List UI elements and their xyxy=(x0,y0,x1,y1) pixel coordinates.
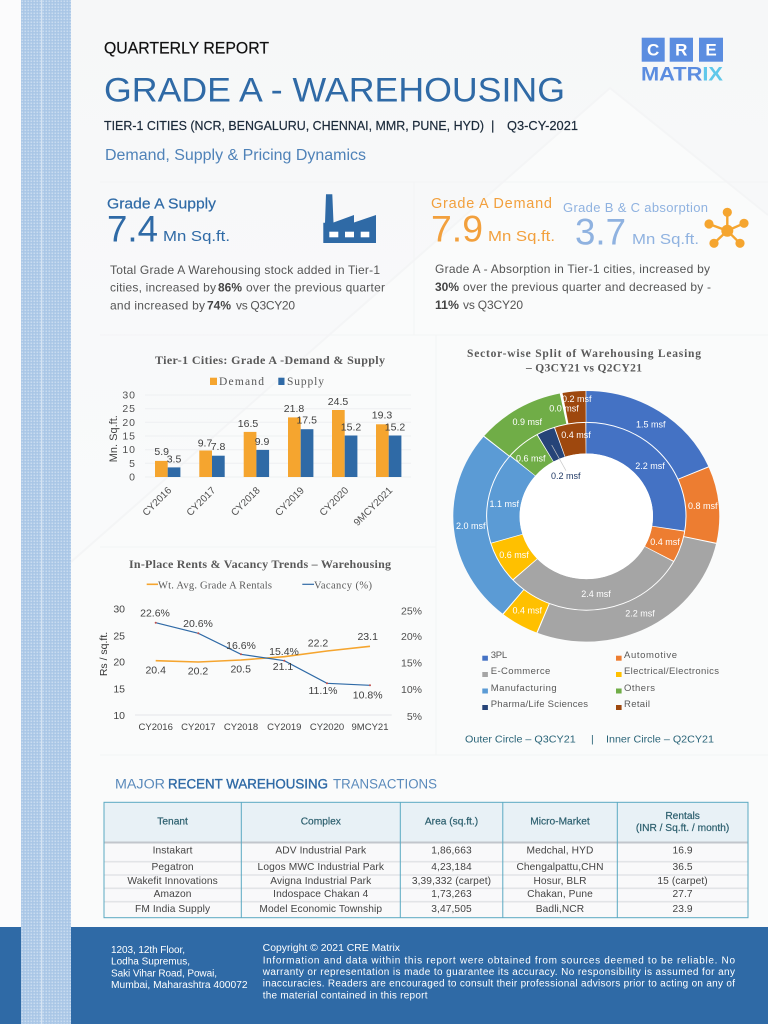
row: Amazon: Indospace Chakan 4 xyxy=(273,889,369,900)
supply heading: Grade A Supply xyxy=(107,196,217,212)
left axis values: 10 xyxy=(113,710,125,722)
donut value labels: 0.4 msf xyxy=(650,537,680,547)
donut value labels: 0.6 msf xyxy=(516,454,546,464)
right axis values: 5% xyxy=(407,711,422,723)
donut value labels: 0.4 msf xyxy=(561,430,591,440)
footer address xyxy=(111,945,248,991)
absorption value: 3.7 xyxy=(575,212,626,252)
table header xyxy=(157,811,729,834)
data labels xyxy=(154,396,405,466)
legend: Vacancy (%) xyxy=(314,580,372,592)
donut legend: Retail xyxy=(624,699,650,710)
row: Instakart: Medchal, HYD xyxy=(527,846,593,856)
chart: sector split donut xyxy=(422,348,750,746)
right axis values: 10% xyxy=(401,684,422,696)
row: Amazon: 1,73,263 xyxy=(431,889,472,900)
donut legend: Electrical/Electronics xyxy=(624,666,719,677)
left axis values: 30 xyxy=(113,603,125,615)
vacancy labels: 16.6% xyxy=(226,640,256,652)
x axis labels xyxy=(139,722,388,733)
main title: GRADE A - WAREHOUSING xyxy=(104,72,565,110)
footer address: 1203, 12th Floor, xyxy=(111,945,185,956)
row: Wakefit Innovations: 3,39,332 (carpet) xyxy=(412,876,491,887)
logo: CRE Matrix: R xyxy=(675,40,687,60)
demand description: 30% xyxy=(435,280,459,294)
vacancy labels xyxy=(140,608,383,701)
section tagline: Demand, Supply & Pricing Dynamics xyxy=(105,147,366,164)
supply description: over the previous quarter xyxy=(246,281,385,295)
rental labels xyxy=(145,631,378,678)
data labels: 15.2 xyxy=(385,422,405,434)
right axis values: 20% xyxy=(401,631,422,643)
donut value labels: 1.5 msf xyxy=(636,420,666,430)
donut rings xyxy=(422,362,750,671)
icon: factory xyxy=(323,194,376,243)
row: Instakart: ADV Industrial Park xyxy=(275,846,367,856)
vacancy line xyxy=(156,623,370,685)
y axis values: 10 xyxy=(122,444,136,456)
chart: rents and vacancy lines xyxy=(98,557,422,733)
row: FM India Supply: FM India Supply xyxy=(135,904,211,915)
subtitle: cities and quarter: Q3-CY-2021 xyxy=(507,118,578,133)
row: Wakefit Innovations: 15 (carpet) xyxy=(657,876,708,887)
y axis values: 30 xyxy=(122,390,136,402)
data labels: 21.8 xyxy=(284,403,304,415)
footer band xyxy=(0,927,768,1024)
table header: Micro-Market xyxy=(530,816,590,828)
section heading: transactions: TRANSACTIONS xyxy=(333,776,437,792)
donut value labels: 0.2 msf xyxy=(562,394,592,404)
x axis labels: CY2020 xyxy=(310,722,344,733)
chart: demand and supply bars xyxy=(108,353,411,528)
row: Pegatron: Chengalpattu,CHN xyxy=(516,862,604,873)
row: Wakefit Innovations: Avigna Industrial Park xyxy=(270,876,372,887)
vacancy labels: 10.8% xyxy=(353,689,383,701)
logo: CRE Matrix xyxy=(641,38,723,86)
demand description: Grade A - Absorption in Tier-1 cities, increased by xyxy=(435,262,710,276)
rental labels: 23.1 xyxy=(357,631,378,643)
supply description xyxy=(110,263,385,312)
y axis title: Mn. Sq.ft. xyxy=(108,415,120,462)
footer disclaimer: Copyright © 2021 CRE Matrix xyxy=(263,943,400,954)
rental labels: 20.4 xyxy=(145,665,166,677)
vacancy markers xyxy=(155,622,371,686)
legend xyxy=(210,376,324,388)
y axis values: 25 xyxy=(122,403,136,415)
x axis labels: CY2018 xyxy=(224,722,258,733)
row: Instakart: 1,86,663 xyxy=(431,846,472,856)
footer address: Saki Vihar Road, Powai, xyxy=(111,968,217,980)
vacancy labels: 20.6% xyxy=(183,618,213,630)
demand heading: Grade A Demand xyxy=(431,196,552,212)
footer address: Lodha Supremus, xyxy=(111,956,190,968)
supply description: 86% xyxy=(218,281,242,295)
row: Instakart xyxy=(153,846,693,856)
legend xyxy=(147,580,372,592)
data labels: 24.5 xyxy=(328,396,348,408)
donut legend: 3PL xyxy=(491,650,507,661)
demand description: 11% xyxy=(435,298,459,312)
row: Wakefit Innovations: Wakefit Innovations xyxy=(127,876,218,887)
row: Amazon xyxy=(154,889,693,900)
legend: Wt. Avg. Grade A Rentals xyxy=(158,580,272,592)
donut value labels: 0.9 msf xyxy=(513,417,543,427)
absorption heading: Grade B & C absorption xyxy=(563,200,708,215)
ring key: | xyxy=(591,734,594,746)
chart title: – Q3CY21 vs Q2CY21 xyxy=(525,363,642,375)
donut value labels: 1.1 msf xyxy=(490,499,520,509)
rental labels: 20.2 xyxy=(188,666,208,678)
section heading: transactions: RECENT WAREHOUSING xyxy=(168,776,328,792)
x axis labels xyxy=(141,485,395,528)
x axis labels: CY2019 xyxy=(273,485,307,519)
absorption unit: Mn Sq.ft. xyxy=(632,231,699,248)
rental labels: 22.2 xyxy=(308,637,328,649)
data labels: 17.5 xyxy=(296,415,317,427)
chart title xyxy=(467,348,701,375)
donut legend: E-Commerce xyxy=(491,666,550,677)
rental labels: 21.1 xyxy=(273,661,293,673)
footer disclaimer: Information and data within this report were obtained from sources deemed to be reliable. No xyxy=(263,955,735,966)
subtitle: cities and quarter: TIER-1 CITIES (NCR, BENGALURU, CHENNAI, MMR, PUNE, HYD) xyxy=(104,118,484,133)
vacancy labels: 15.4% xyxy=(269,646,299,658)
demand description: over the previous quarter and decreased by - xyxy=(463,280,711,294)
left axis values: 15 xyxy=(113,683,125,695)
demand value: 7.9 xyxy=(431,209,483,250)
row: Pegatron: Logos MWC Industrial Park xyxy=(258,862,385,873)
donut value labels: 0.2 msf xyxy=(551,471,581,481)
left axis title: Rs / sq.ft. xyxy=(98,632,110,676)
data labels: 5.9 xyxy=(154,446,169,458)
table header: Complex xyxy=(301,816,341,828)
row: FM India Supply: Badli,NCR xyxy=(536,904,584,915)
row: Wakefit Innovations xyxy=(127,876,708,887)
chart title: Sector-wise Split of Warehousing Leasing xyxy=(467,348,701,360)
vacancy labels: 11.1% xyxy=(308,685,338,697)
section heading: transactions: MAJOR xyxy=(115,776,165,792)
donut legend: Pharma/Life Sciences xyxy=(491,699,588,710)
logo: CRE Matrix: E xyxy=(705,40,717,60)
rentals line xyxy=(156,646,370,662)
x axis labels: CY2020 xyxy=(318,485,351,519)
icon: network nodes xyxy=(704,208,749,248)
data labels: 3.5 xyxy=(167,454,181,466)
x axis labels: CY2016 xyxy=(139,722,173,733)
outer ring: Q3CY21 xyxy=(422,362,750,671)
donut value labels: 0.4 msf xyxy=(513,606,543,616)
left axis values: 20 xyxy=(113,657,125,669)
y axis values: 15 xyxy=(122,430,136,442)
vacancy labels: 22.6% xyxy=(140,608,170,620)
y axis values: 0 xyxy=(129,472,136,484)
y axis values: 5 xyxy=(129,458,136,470)
x axis labels: CY2017 xyxy=(185,485,218,519)
table: recent transactions xyxy=(104,802,748,918)
chart title: In-Place Rents & Vacancy Trends – Warehousing xyxy=(129,557,391,571)
row: FM India Supply: 23.9 xyxy=(672,904,693,915)
donut value labels: 2.4 msf xyxy=(581,589,611,599)
decorative side stripe xyxy=(21,0,71,1024)
row: FM India Supply xyxy=(135,904,693,915)
donut legend: Manufacturing xyxy=(491,683,557,694)
x axis labels: CY2017 xyxy=(181,722,215,733)
donut legend xyxy=(482,650,719,710)
x axis labels: 9MCY21 xyxy=(352,722,388,733)
panel: grade A demand xyxy=(431,196,749,312)
supply value: 7.4 xyxy=(107,209,158,250)
data labels: 9.9 xyxy=(255,436,269,448)
donut legend: Automotive xyxy=(624,650,677,661)
row: Pegatron xyxy=(152,862,693,873)
x axis labels: CY2016 xyxy=(141,485,174,519)
row: Wakefit Innovations: Hosur, BLR xyxy=(533,876,587,887)
row: Amazon: Amazon xyxy=(154,889,192,900)
donut legend: Others xyxy=(624,683,655,694)
data labels: 7.8 xyxy=(211,441,225,453)
row: Pegatron: Pegatron xyxy=(152,862,194,873)
legend: Supply xyxy=(287,376,324,388)
data labels: 19.3 xyxy=(372,409,392,421)
demand bars xyxy=(155,410,389,477)
logo: CRE Matrix: MATR IX xyxy=(641,64,723,86)
y axis values: 20 xyxy=(122,417,136,429)
row: Amazon: Chakan, Pune xyxy=(527,889,593,900)
y axis values xyxy=(122,390,136,484)
x axis labels: CY2019 xyxy=(267,722,301,733)
row: Instakart: Instakart xyxy=(153,846,193,856)
demand description xyxy=(435,262,711,312)
right axis values: 25% xyxy=(401,606,422,618)
supply description: cities, increased by xyxy=(110,281,216,295)
donut value labels: 2.2 msf xyxy=(635,461,665,471)
ring key xyxy=(465,734,714,746)
row: Amazon: 27.7 xyxy=(672,889,693,900)
supply description: vs Q3CY20 xyxy=(236,298,295,312)
x axis labels: 9MCY2021 xyxy=(352,485,395,528)
footer disclaimer: the material contained in this report xyxy=(263,991,428,1002)
donut value labels xyxy=(456,394,718,618)
right axis values: 15% xyxy=(401,658,422,670)
x axis labels: CY2018 xyxy=(229,485,263,519)
donut value labels: 2.2 msf xyxy=(625,608,655,618)
demand unit: Mn Sq.ft. xyxy=(488,228,555,245)
footer disclaimer xyxy=(262,943,735,1002)
row: FM India Supply: Model Economic Township xyxy=(259,904,382,915)
supply unit: Mn Sq.ft. xyxy=(163,228,230,245)
data labels: 16.5 xyxy=(238,418,258,430)
legend: Demand xyxy=(219,376,264,388)
inner ring: Q2CY21 xyxy=(469,406,704,627)
donut value labels: 2.0 msf xyxy=(456,521,486,531)
footer address: Mumbai, Maharashtra 400072 xyxy=(111,980,248,991)
chart title: Tier-1 Cities: Grade A -Demand & Supply xyxy=(155,353,385,367)
section heading: transactions xyxy=(115,776,437,792)
supply description: 74% xyxy=(207,298,231,312)
footer disclaimer: warranty or representation is made to guarantee its accuracy. No responsibility is assumed for any xyxy=(262,967,735,978)
donut value labels: 0.0 msf xyxy=(549,404,579,414)
donut value labels: 0.8 msf xyxy=(688,501,718,511)
table header: (INR / Sq.ft. / month) xyxy=(636,823,729,834)
table header: Tenant xyxy=(157,816,188,828)
row: Pegatron: 36.5 xyxy=(672,862,693,873)
demand description: vs Q3CY20 xyxy=(463,298,523,312)
rental labels: 20.5 xyxy=(230,663,251,675)
ring key: Inner Circle – Q2CY21 xyxy=(606,734,714,746)
left axis values: 25 xyxy=(113,631,125,643)
footer disclaimer: inaccuracies. Readers are encouraged to consult their professional advisors prior to acting on any of xyxy=(263,979,735,990)
supply description: and increased by xyxy=(110,298,205,312)
donut value labels: 0.6 msf xyxy=(499,550,529,560)
table header: Rentals xyxy=(665,811,700,822)
supply bars xyxy=(168,429,401,477)
table header: Area (sq.ft.) xyxy=(425,816,478,828)
leader line xyxy=(552,445,566,471)
logo: CRE Matrix: C xyxy=(647,40,659,60)
supply description: Total Grade A Warehousing stock added in Tier-1 xyxy=(110,263,380,277)
data labels: 15.2 xyxy=(341,422,361,434)
row: Pegatron: 4,23,184 xyxy=(431,862,472,873)
left axis values xyxy=(113,603,125,722)
right axis values xyxy=(401,606,422,723)
row: FM India Supply: 3,47,505 xyxy=(431,904,472,915)
report label: QUARTERLY REPORT xyxy=(104,39,269,57)
data labels: 9.7 xyxy=(198,438,212,450)
row: Instakart: 16.9 xyxy=(672,846,693,856)
subtitle: cities and quarter: | xyxy=(491,118,494,133)
ring key: Outer Circle – Q3CY21 xyxy=(465,734,576,746)
panel: grade A supply xyxy=(107,194,385,312)
